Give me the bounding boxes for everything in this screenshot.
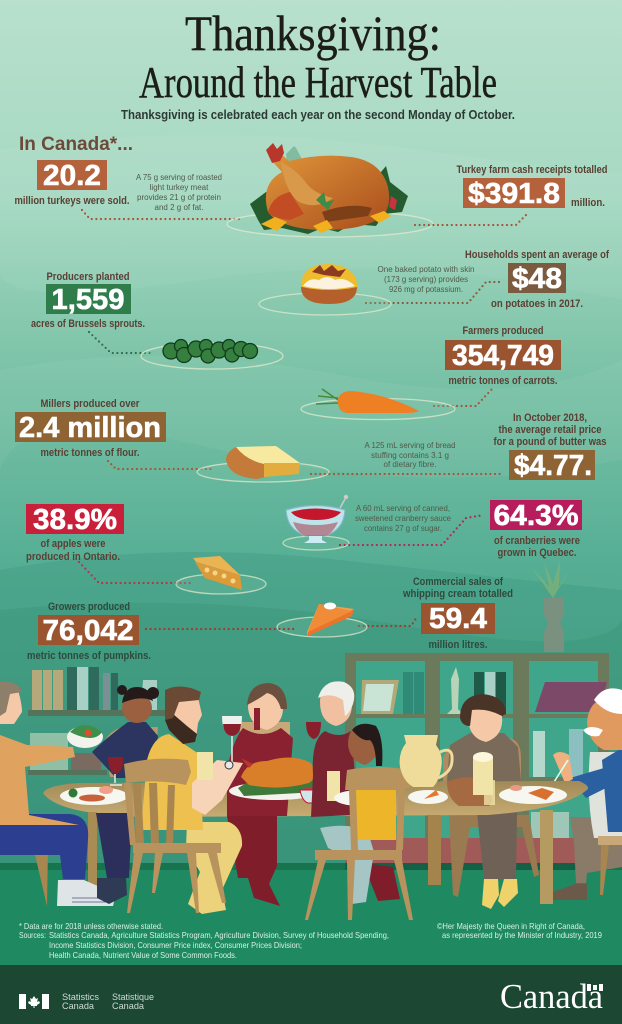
stat: flour: Millers produced over bbox=[40, 398, 140, 410]
plant and vase bbox=[532, 560, 571, 652]
person: bearded man in yellow bbox=[141, 686, 243, 914]
note: cranberry nutrition: A 60 mL serving of canned, bbox=[356, 504, 450, 513]
front chair bbox=[124, 759, 226, 913]
stat: pumpkins: metric tonnes of pumpkins. bbox=[27, 650, 151, 662]
stat: turkeys sold bbox=[14, 160, 130, 207]
stat: whipping cream: 59.4 bbox=[429, 603, 487, 635]
stat: turkey receipts: million. bbox=[571, 197, 605, 209]
stat: cranberries bbox=[490, 500, 582, 559]
salad bowl bbox=[67, 725, 103, 748]
note: potato nutrition: 926 mg of potassium. bbox=[389, 285, 463, 294]
note: cranberry nutrition bbox=[355, 504, 452, 533]
footnotes and sources: Sources: bbox=[19, 930, 46, 940]
dotted connector: receipts bbox=[415, 215, 526, 225]
illustration: baked potato bbox=[259, 264, 391, 315]
logo: Canadian flag bbox=[19, 994, 49, 1009]
footer bar bbox=[0, 965, 622, 1024]
stat: whipping cream: whipping cream totalled bbox=[402, 588, 513, 600]
stat: brussels sprouts: acres of Brussels sprouts. bbox=[31, 318, 145, 330]
dotted connector: sprouts bbox=[89, 332, 153, 353]
logo text: Statistics Canada bbox=[62, 992, 154, 1012]
logo text: Statistics Canada: Canada bbox=[62, 1001, 95, 1012]
stat: whipping cream: Commercial sales of bbox=[413, 576, 503, 588]
note: cranberry nutrition: sweetened cranberry sauce bbox=[355, 514, 452, 523]
stat: butter price: In October 2018, bbox=[513, 412, 587, 424]
stat: butter price: the average retail price bbox=[498, 424, 602, 436]
stat: brussels sprouts: Producers planted bbox=[46, 271, 130, 283]
beer glasses bbox=[473, 752, 495, 805]
stat: apples bbox=[26, 504, 124, 563]
stat: brussels sprouts bbox=[31, 271, 145, 330]
stat: pumpkins: 76,042 bbox=[42, 615, 134, 647]
stat: carrots: metric tonnes of carrots. bbox=[448, 375, 558, 387]
stat: carrots: Farmers produced bbox=[462, 325, 544, 337]
subtitle: Thanksgiving is celebrated each year on the second Monday of October. bbox=[121, 108, 515, 122]
pitcher of lemonade bbox=[400, 735, 452, 787]
floor bbox=[0, 863, 622, 966]
illustration: pumpkin pie bbox=[277, 602, 367, 637]
footnotes and sources: Health Canada, Nutrient Value of Some Common Foods. bbox=[49, 950, 237, 960]
person: far-right older man bbox=[553, 688, 622, 900]
note: stuffing nutrition: of dietary fibre. bbox=[384, 460, 436, 469]
person: girl in yellow bbox=[320, 724, 382, 904]
footnotes and sources bbox=[19, 921, 389, 960]
note: turkey nutrition: A 75 g serving of roasted bbox=[136, 173, 222, 182]
wine glass bbox=[108, 757, 123, 785]
logo text: Statistics Canada: Statistics bbox=[62, 992, 99, 1003]
turkey platter bbox=[229, 757, 322, 800]
copyright: ©Her Majesty the Queen in Right of Canada, bbox=[437, 921, 585, 931]
title: Thanksgiving: bbox=[185, 5, 441, 61]
note: stuffing nutrition bbox=[364, 441, 456, 469]
stat: flour bbox=[15, 398, 166, 459]
bookcase bbox=[345, 653, 609, 870]
dotted connector: turkeys bbox=[82, 210, 240, 219]
person: woman in maroon bbox=[227, 683, 293, 906]
wine glass and beer, centre right bbox=[306, 722, 340, 801]
note: turkey nutrition bbox=[136, 173, 222, 212]
logo text: Statistics Canada: Canada bbox=[112, 1001, 145, 1012]
stat: flour: 2.4 million bbox=[19, 412, 161, 444]
footnotes and sources: Statistics Canada, Agriculture Statistics Program, Agriculture Division, Survey of Household Spending, bbox=[49, 930, 389, 940]
dotted connector: apples bbox=[79, 562, 192, 583]
person: laughing man with curly hair bbox=[443, 694, 539, 909]
stat: turkeys sold: million turkeys were sold. bbox=[14, 195, 130, 207]
stat: carrots bbox=[445, 325, 561, 387]
dotted connector: cranberries bbox=[340, 515, 484, 545]
table bbox=[43, 781, 588, 904]
stat: potatoes: on potatoes in 2017. bbox=[491, 298, 583, 310]
dotted connector: flour bbox=[108, 461, 214, 469]
wordmark: Canada: Canada bbox=[500, 977, 603, 1016]
stat: turkey receipts: $391.8 bbox=[468, 178, 560, 210]
stat: butter price: $4.77. bbox=[514, 450, 592, 482]
title bbox=[139, 5, 497, 107]
illustration: roast turkey bbox=[227, 143, 433, 237]
stat: cranberries: of cranberries were bbox=[494, 535, 580, 547]
illustration: bread and butter bbox=[197, 446, 329, 482]
plates and pie bbox=[408, 785, 567, 804]
note: potato nutrition: One baked potato with skin bbox=[378, 265, 474, 274]
left wall shelves with books bbox=[28, 667, 165, 775]
stat: potatoes bbox=[465, 249, 609, 310]
dotted connector: carrot bbox=[434, 388, 493, 406]
footnotes and sources: * Data are for 2018 unless otherwise stated. bbox=[19, 921, 163, 931]
note: cranberry nutrition: contains 27 g of sugar. bbox=[364, 524, 442, 533]
stat: pumpkins bbox=[27, 601, 151, 662]
dotted connector: potato bbox=[366, 282, 501, 303]
cranberry dish bbox=[300, 790, 326, 803]
stat: apples: 38.9% bbox=[33, 504, 117, 536]
stat: cranberries: 64.3% bbox=[494, 500, 579, 532]
stat: apples: of apples were bbox=[40, 538, 106, 550]
stat: brussels sprouts: 1,559 bbox=[52, 284, 124, 316]
stat: turkey receipts bbox=[456, 164, 608, 210]
dotted connector: pumpkins bbox=[146, 628, 296, 630]
bread loaf bbox=[447, 777, 493, 806]
stat: whipping cream bbox=[402, 576, 513, 651]
stat: whipping cream: million litres. bbox=[428, 639, 488, 651]
centre-right plate bbox=[334, 790, 386, 806]
person: woman with white hair bbox=[311, 681, 400, 901]
stat: flour: metric tonnes of flour. bbox=[40, 447, 140, 459]
copyright bbox=[437, 921, 602, 940]
title: Around the Harvest Table bbox=[139, 58, 497, 107]
note: turkey nutrition: provides 21 g of protein bbox=[137, 193, 221, 202]
person: man with glasses, left bbox=[0, 682, 116, 906]
stat: turkeys sold: 20.2 bbox=[43, 160, 101, 192]
logo text: Statistics Canada: Statistique bbox=[112, 992, 154, 1003]
note: stuffing nutrition: stuffing contains 3.1 g bbox=[371, 451, 449, 460]
illustration: Brussels sprouts bbox=[141, 340, 283, 369]
note: stuffing nutrition: A 125 mL serving of bread bbox=[364, 441, 456, 450]
footnotes and sources: Income Statistics Division, Consumer Price index, Consumer Prices Division; bbox=[49, 940, 302, 950]
note: turkey nutrition: light turkey meat bbox=[150, 183, 209, 192]
wine glass held bbox=[222, 716, 242, 769]
illustration: carrot bbox=[301, 389, 455, 420]
note: turkey nutrition: and 2 g of fat. bbox=[155, 203, 203, 212]
dotted connector: butter bbox=[311, 473, 502, 475]
heading: in Canada: In Canada*... bbox=[19, 134, 133, 155]
illustration: apple pie bbox=[176, 556, 266, 594]
beer glass bbox=[197, 752, 213, 780]
stat: apples: produced in Ontario. bbox=[26, 551, 120, 563]
stat: butter price bbox=[494, 412, 606, 482]
copyright: as represented by the Minister of Industry, 2019 bbox=[442, 930, 602, 940]
person: woman with hair buns bbox=[92, 685, 159, 904]
illustration: cranberry sauce bowl bbox=[283, 495, 349, 550]
stat: butter price: for a pound of butter was bbox=[494, 436, 606, 448]
front chair, right bbox=[305, 767, 413, 920]
stat: potatoes: $48 bbox=[512, 263, 562, 295]
note: potato nutrition: (173 g serving) provides bbox=[384, 275, 468, 284]
stat: cranberries: grown in Quebec. bbox=[498, 547, 576, 559]
left plate of food bbox=[60, 786, 128, 805]
stat: pumpkins: Growers produced bbox=[48, 601, 130, 613]
dotted connector: cream bbox=[359, 617, 417, 626]
note: potato nutrition bbox=[378, 265, 474, 294]
stat: carrots: 354,749 bbox=[452, 340, 554, 372]
